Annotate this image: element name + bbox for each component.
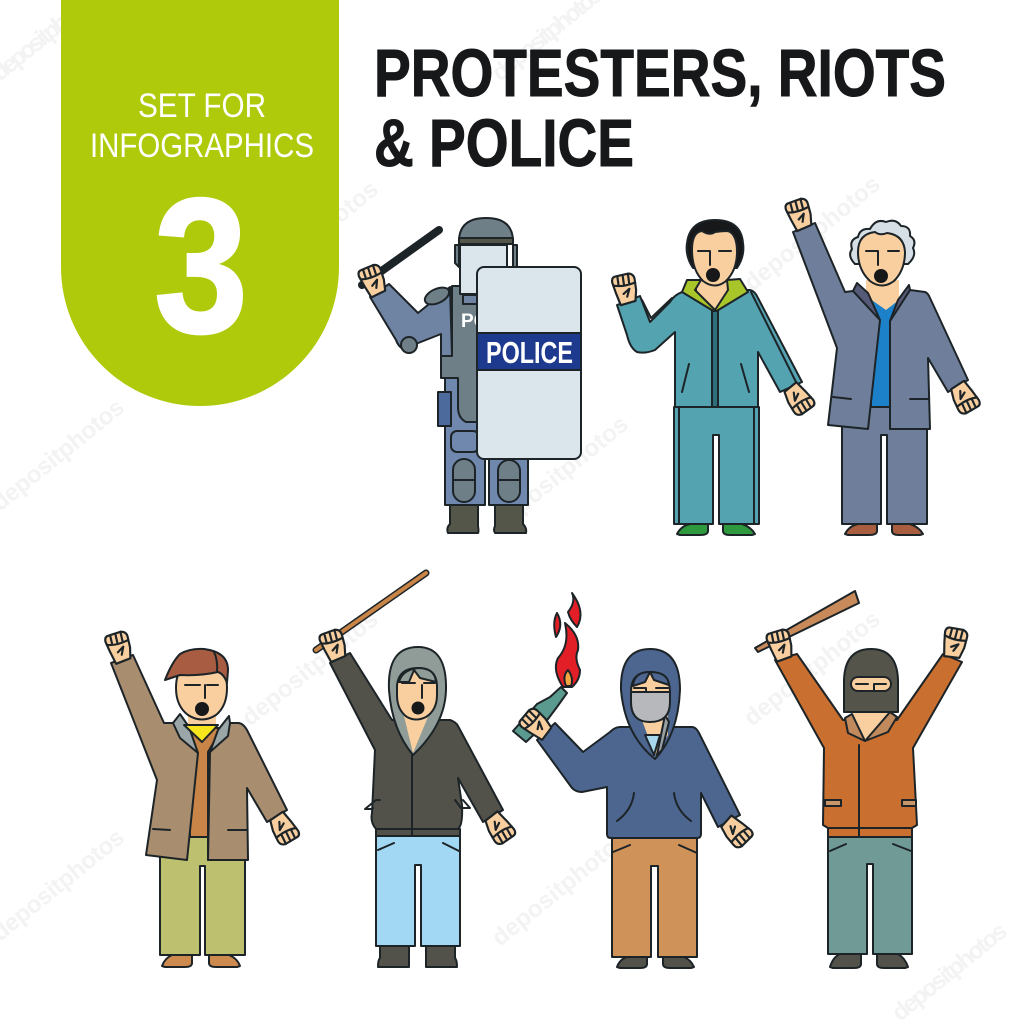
right lapel <box>865 712 897 741</box>
neck <box>188 712 216 726</box>
watermark: depositphotos <box>237 606 384 732</box>
hood <box>682 279 748 312</box>
neck <box>640 715 668 755</box>
mouth <box>706 268 720 282</box>
hand with baton <box>357 263 388 299</box>
jacket right <box>890 290 968 429</box>
shoes <box>162 955 240 967</box>
hand with stick <box>318 628 348 663</box>
hair <box>850 221 914 264</box>
raised fist <box>784 197 814 232</box>
boots <box>447 505 526 533</box>
figure: man in brown jacket <box>104 630 301 967</box>
facial lines <box>402 683 435 698</box>
zip <box>712 311 718 407</box>
jacket <box>330 653 503 829</box>
trousers <box>674 407 759 524</box>
mouth <box>874 269 888 283</box>
flame main <box>556 623 580 687</box>
banner label: infographics: INFOGRAPHICS <box>90 127 314 165</box>
face <box>176 660 227 720</box>
face <box>631 672 670 692</box>
shield <box>477 267 581 459</box>
watermark: depositphotos <box>887 918 1013 1024</box>
figure: masked man with molotov <box>513 593 755 968</box>
shoes <box>845 524 923 535</box>
flame inner <box>564 670 572 686</box>
figure: balaclava man with bat <box>755 591 969 968</box>
trouser stripes <box>679 407 754 524</box>
face <box>858 232 905 286</box>
shirt <box>645 735 660 755</box>
hoodie <box>537 723 740 838</box>
neck <box>866 280 899 310</box>
facial lines <box>866 251 899 265</box>
eye lines <box>634 688 668 692</box>
jean pockets <box>378 843 459 851</box>
neck <box>853 708 888 741</box>
baton <box>362 230 439 285</box>
lower hand <box>718 812 755 850</box>
figure: man in grey hood with stick <box>316 573 517 967</box>
torso vest <box>441 286 480 422</box>
chest lettering: PC <box>461 311 488 332</box>
jacket <box>617 290 802 407</box>
legs <box>445 378 528 505</box>
hood <box>389 647 446 755</box>
watermark: depositphotos <box>739 171 886 297</box>
title line 2: & POLICE <box>374 106 634 181</box>
neck <box>403 712 430 753</box>
lower hand <box>267 809 301 846</box>
jacket <box>775 654 962 828</box>
flame small right <box>568 593 581 627</box>
hair line <box>214 652 217 672</box>
waist band <box>376 829 460 836</box>
hair strands <box>399 668 436 682</box>
pocket right <box>902 800 916 806</box>
lapels <box>173 714 230 753</box>
shield text: POLICE <box>486 335 573 370</box>
facial lines <box>698 251 731 265</box>
raised fist <box>104 630 133 665</box>
raised fist <box>939 626 969 661</box>
mouth <box>412 702 424 714</box>
figure: grey-haired man in suit <box>784 197 982 535</box>
bottle <box>513 687 567 742</box>
helmet ear guards <box>455 245 517 268</box>
shoes <box>617 957 694 968</box>
jacket left <box>793 223 880 429</box>
shirt <box>188 728 222 837</box>
banner number: 3 <box>154 158 248 373</box>
left knee pad <box>453 459 475 502</box>
stick <box>316 573 426 650</box>
lower hand <box>948 379 982 416</box>
hair <box>165 649 228 683</box>
jacket left <box>111 655 198 860</box>
trouser pockets <box>830 844 911 851</box>
watermark: depositphotos <box>237 176 384 302</box>
shirt <box>870 300 899 407</box>
shield band <box>477 333 581 370</box>
helmet band <box>459 238 513 244</box>
raised fist <box>611 273 638 306</box>
helmet <box>459 218 513 240</box>
pocket left <box>825 800 841 806</box>
scarf end <box>657 715 669 755</box>
banner label: set for: SET FOR <box>138 87 266 125</box>
trouser pockets <box>613 845 697 853</box>
balaclava <box>844 649 898 712</box>
waist band <box>828 828 912 837</box>
thigh pad <box>451 431 479 452</box>
watermark: depositphotos <box>487 411 634 537</box>
left lapel <box>845 714 865 741</box>
lower hand <box>782 379 817 417</box>
neck <box>697 280 731 312</box>
raised arm <box>370 284 452 356</box>
facial lines <box>185 685 218 698</box>
banner <box>61 0 339 406</box>
figure: man in teal tracksuit <box>611 220 817 535</box>
pocket lines <box>833 397 929 399</box>
face <box>692 231 737 286</box>
right knee pad <box>498 460 520 502</box>
knee strap lines <box>453 479 520 481</box>
neck <box>463 295 479 304</box>
hand with bat <box>765 629 794 663</box>
shoes <box>677 524 755 535</box>
flame small left <box>554 613 560 637</box>
scarf <box>184 725 218 742</box>
trousers <box>828 837 912 954</box>
pocket flaps and zip <box>365 755 470 836</box>
visor <box>460 245 507 294</box>
watermark: depositphotos <box>487 826 634 952</box>
lapels <box>853 283 910 321</box>
watermark: depositphotos <box>739 606 886 732</box>
hair <box>633 672 669 686</box>
boots <box>378 946 457 967</box>
trousers <box>160 837 245 955</box>
trousers <box>842 407 927 524</box>
pocket lines <box>153 752 247 860</box>
hand with bottle <box>517 706 554 744</box>
shoes <box>830 954 908 968</box>
elbow pad <box>401 337 417 353</box>
mouth <box>195 702 209 716</box>
mask <box>631 692 670 722</box>
shoulder pad <box>422 284 452 308</box>
hoodie pockets <box>617 793 691 821</box>
lower hand <box>483 809 517 846</box>
pouch <box>438 392 451 426</box>
jeans <box>376 836 460 946</box>
trousers <box>612 838 697 957</box>
facial lines <box>856 684 886 690</box>
eye hole <box>851 677 891 691</box>
hair <box>687 220 743 268</box>
jacket right <box>208 723 287 860</box>
stick fill <box>316 573 426 650</box>
jacket centre line <box>858 745 860 837</box>
jacket stripes and pockets <box>642 292 797 392</box>
bat <box>755 591 859 652</box>
hood <box>621 649 680 759</box>
face <box>397 668 437 720</box>
figure: riot police officer <box>357 218 581 533</box>
